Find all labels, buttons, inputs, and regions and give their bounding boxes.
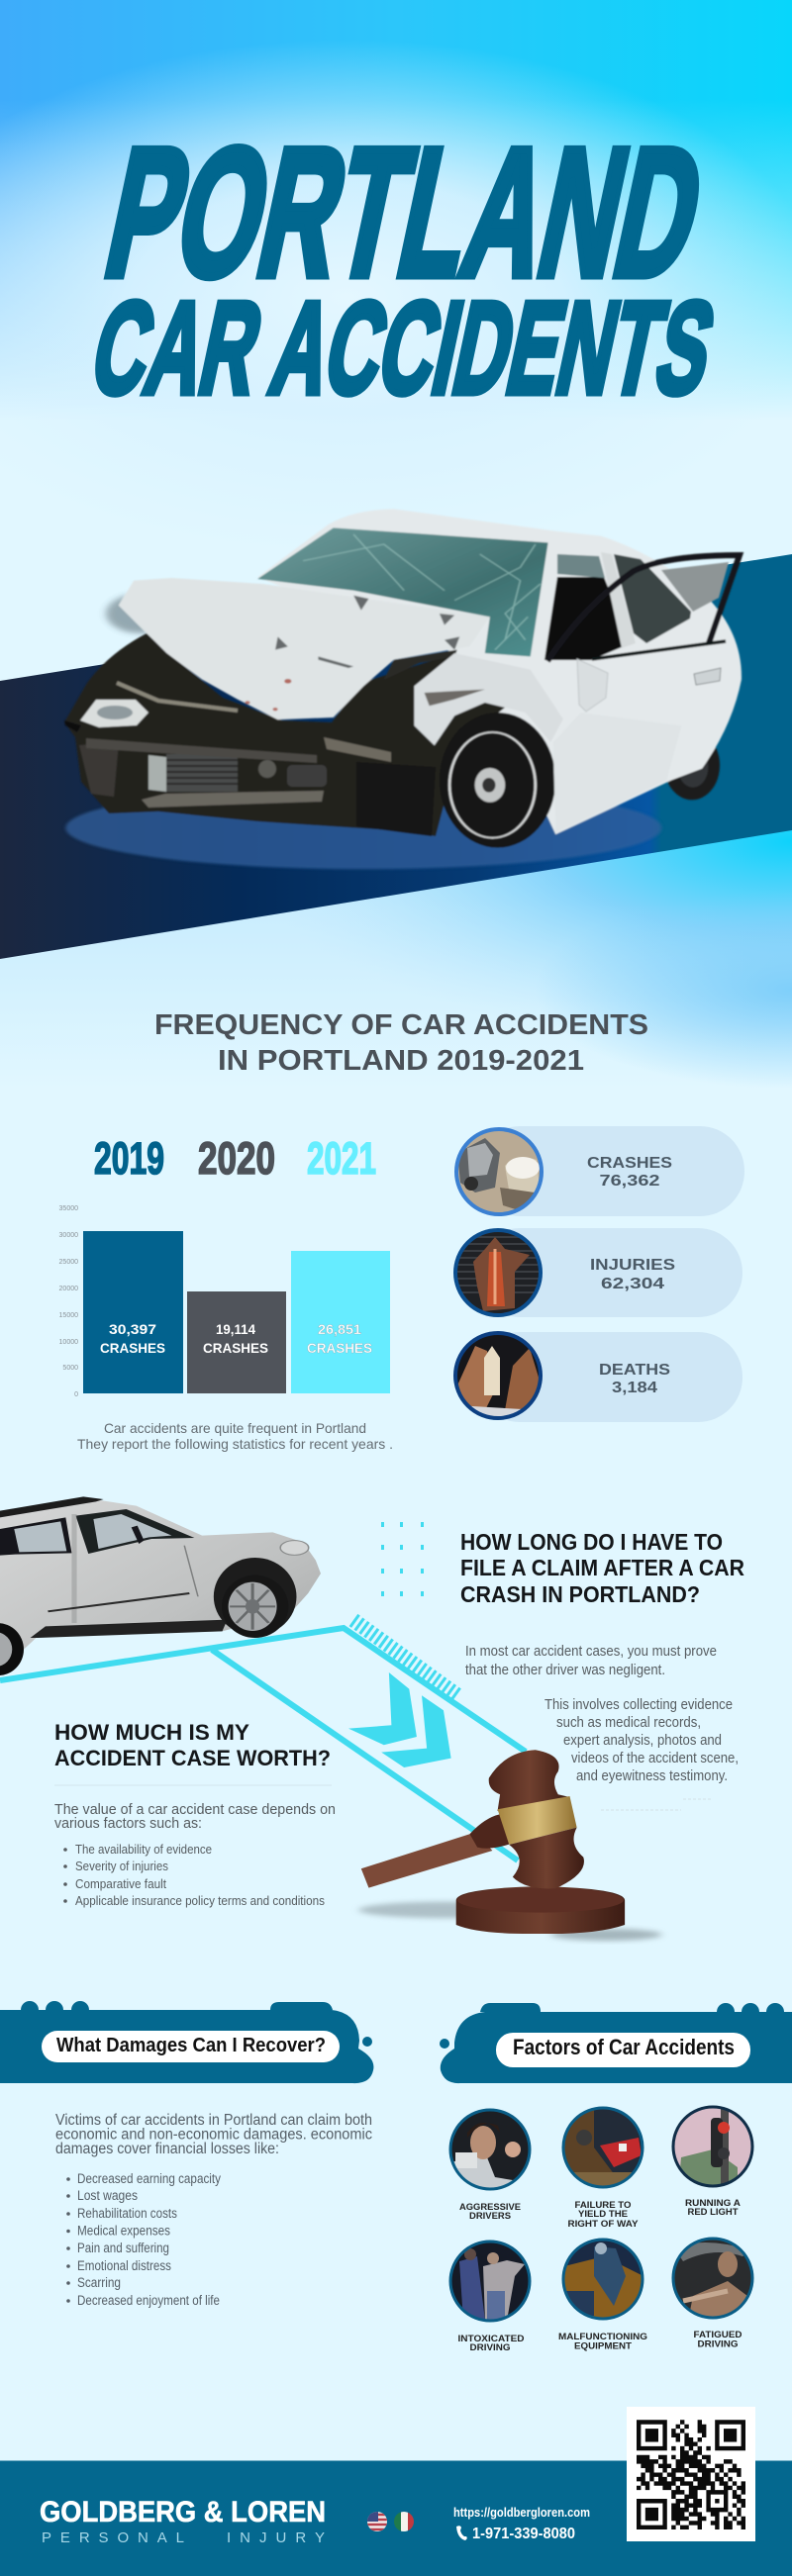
silver SUV photo	[0, 1496, 321, 1675]
factor: running red light: RUNNING A	[685, 2198, 741, 2209]
list: damages: Pain and suffering	[77, 2241, 169, 2255]
text: damages intro: damages cover financial losses like:	[55, 2141, 279, 2157]
text: negligence: that the other driver was negligent.	[465, 1662, 665, 1678]
factor: intoxicated driving: INTOXICATED	[457, 2334, 525, 2344]
crashed car photo	[64, 509, 742, 869]
year labels: 2020	[198, 1133, 275, 1184]
heading: how much: ACCIDENT CASE WORTH?	[54, 1746, 331, 1770]
factor: running red light	[668, 2106, 757, 2218]
stat pill: injuries: INJURIES	[590, 1257, 675, 1274]
QR code	[627, 2407, 755, 2541]
bar chart: 15000	[59, 1312, 78, 1319]
text: evidence: and eyewitness testimony.	[576, 1767, 728, 1784]
heading: how long: FILE A CLAIM AFTER A CAR	[460, 1555, 744, 1580]
text: case value: The value of a car accident case depends on	[54, 1801, 336, 1818]
section heading: frequency: FREQUENCY OF CAR ACCIDENTS	[154, 1009, 648, 1041]
factor: fatigued driving: FATIGUED	[693, 2330, 742, 2340]
bar chart: 0	[74, 1391, 78, 1398]
list: case factors: The availability of evidence	[75, 1842, 212, 1857]
dots decoration	[381, 1522, 424, 1596]
banner: factors: Factors of Car Accidents	[513, 2035, 735, 2059]
icon: chevrons	[348, 1672, 451, 1767]
factor: running red light: RED LIGHT	[687, 2207, 739, 2218]
chart caption	[77, 1420, 393, 1452]
stat pill: crashes	[455, 1126, 744, 1217]
text: case value: various factors such as:	[54, 1815, 202, 1832]
stat pill: crashes: CRASHES	[587, 1155, 672, 1172]
text: evidence	[544, 1696, 739, 1784]
list: damages	[66, 2171, 221, 2308]
stat pill: injuries: 62,304	[601, 1276, 664, 1292]
footer bar	[0, 2460, 792, 2576]
list: damages: Lost wages	[77, 2188, 138, 2203]
list: damages: Decreased earning capacity	[77, 2171, 221, 2186]
logo: Goldberg & Loren	[40, 2496, 326, 2546]
factor: aggressive drivers: AGGRESSIVE	[459, 2202, 521, 2213]
text: negligence: In most car accident cases, you must prove	[465, 1643, 717, 1660]
bar chart: CRASHES	[203, 1340, 268, 1356]
title	[81, 112, 726, 422]
factor: malfunctioning equipment: EQUIPMENT	[574, 2341, 632, 2351]
section heading: frequency: IN PORTLAND 2019-2021	[218, 1045, 584, 1077]
banner: what damages	[0, 2001, 373, 2083]
bar chart: 10000	[59, 1339, 78, 1346]
diagonal band	[0, 554, 792, 959]
heading: how much	[54, 1720, 331, 1770]
contact details	[453, 2505, 590, 2542]
factor: failure to yield	[559, 2108, 648, 2230]
bar chart: 19,114	[216, 1321, 255, 1337]
chart caption: They report the following statistics for recent years .	[77, 1436, 393, 1452]
list: damages: Rehabilitation costs	[77, 2206, 177, 2221]
icon: US flag	[367, 2512, 387, 2531]
stat pill: deaths: DEATHS	[599, 1362, 670, 1379]
banner: factors	[440, 2003, 792, 2083]
icon: gavel	[358, 1750, 661, 1941]
bar chart: 30000	[59, 1232, 78, 1239]
factor: malfunctioning equipment	[558, 2240, 648, 2351]
list: case factors: Comparative fault	[75, 1876, 166, 1891]
text: damages intro: Victims of car accidents in Portland can claim both	[55, 2112, 372, 2129]
list: case factors: Severity of injuries	[75, 1859, 168, 1873]
text: evidence: This involves collecting evidence	[544, 1696, 733, 1713]
heading: how long: HOW LONG DO I HAVE TO	[460, 1529, 723, 1555]
bar chart	[59, 1205, 390, 1398]
contact details: 1-971-339-8080	[472, 2526, 575, 2542]
section heading: frequency	[154, 1009, 648, 1077]
factor: failure to yield: YIELD THE	[578, 2209, 628, 2220]
stat pill: injuries	[455, 1227, 742, 1318]
factor: fatigued driving: DRIVING	[697, 2339, 739, 2349]
banner: what damages: What Damages Can I Recover?	[56, 2035, 326, 2056]
heading: how long	[460, 1529, 744, 1607]
contact details: https://goldbergloren.com	[453, 2505, 590, 2520]
logo: Goldberg & Loren: GOLDBERG & LOREN	[40, 2496, 326, 2528]
factor: intoxicated driving	[449, 2241, 531, 2350]
icon: Mexico flag	[394, 2512, 415, 2531]
year labels: 2021	[307, 1133, 376, 1184]
bar chart: 30,397	[109, 1321, 156, 1337]
stat pill: crashes: 76,362	[600, 1173, 660, 1190]
list: case factors	[63, 1842, 325, 1908]
heading: how long: CRASH IN PORTLAND?	[460, 1581, 700, 1607]
year labels: 2019	[94, 1133, 164, 1184]
faint remnant text	[601, 1799, 713, 1810]
factor: aggressive drivers: DRIVERS	[469, 2211, 511, 2222]
list: case factors: Applicable insurance policy terms and conditions	[75, 1893, 325, 1908]
bar chart: 35000	[59, 1205, 78, 1212]
list: damages: Medical expenses	[77, 2223, 170, 2239]
text: damages intro: economic and non-economic damages. economic	[55, 2126, 372, 2144]
bar chart: 25000	[59, 1259, 78, 1266]
list: damages: Decreased enjoyment of life	[77, 2293, 220, 2308]
factor: failure to yield: FAILURE TO	[574, 2200, 632, 2211]
stat pill: deaths: 3,184	[612, 1380, 657, 1396]
bar chart: 5000	[62, 1365, 78, 1372]
text: evidence: expert analysis, photos and	[563, 1732, 722, 1749]
stat pill: deaths	[455, 1331, 742, 1425]
logo: Goldberg & Loren: INJURY	[227, 2529, 325, 2546]
bar chart: 26,851	[318, 1321, 361, 1337]
list: damages: Emotional distress	[77, 2258, 171, 2273]
bar chart: 20000	[59, 1286, 78, 1292]
year labels	[94, 1133, 376, 1184]
text: evidence: videos of the accident scene,	[571, 1750, 739, 1766]
chart caption: Car accidents are quite frequent in Portland	[104, 1420, 366, 1436]
factor: malfunctioning equipment: MALFUNCTIONING	[558, 2332, 647, 2342]
factor: fatigued driving	[671, 2237, 754, 2347]
text: evidence: such as medical records,	[556, 1714, 701, 1731]
text: negligence	[465, 1643, 717, 1678]
factor: aggressive drivers	[449, 2108, 531, 2219]
bar chart: CRASHES	[307, 1340, 372, 1356]
logo: Goldberg & Loren: PERSONAL	[42, 2529, 184, 2546]
road lines	[0, 1620, 526, 1860]
list: damages: Scarring	[77, 2275, 121, 2290]
text: case value	[54, 1801, 336, 1832]
heading: how much: HOW MUCH IS MY	[54, 1720, 249, 1745]
text: damages intro	[55, 2112, 372, 2157]
bar chart: CRASHES	[100, 1340, 165, 1356]
factor: failure to yield: RIGHT OF WAY	[568, 2219, 639, 2230]
factor: intoxicated driving: DRIVING	[469, 2342, 511, 2353]
